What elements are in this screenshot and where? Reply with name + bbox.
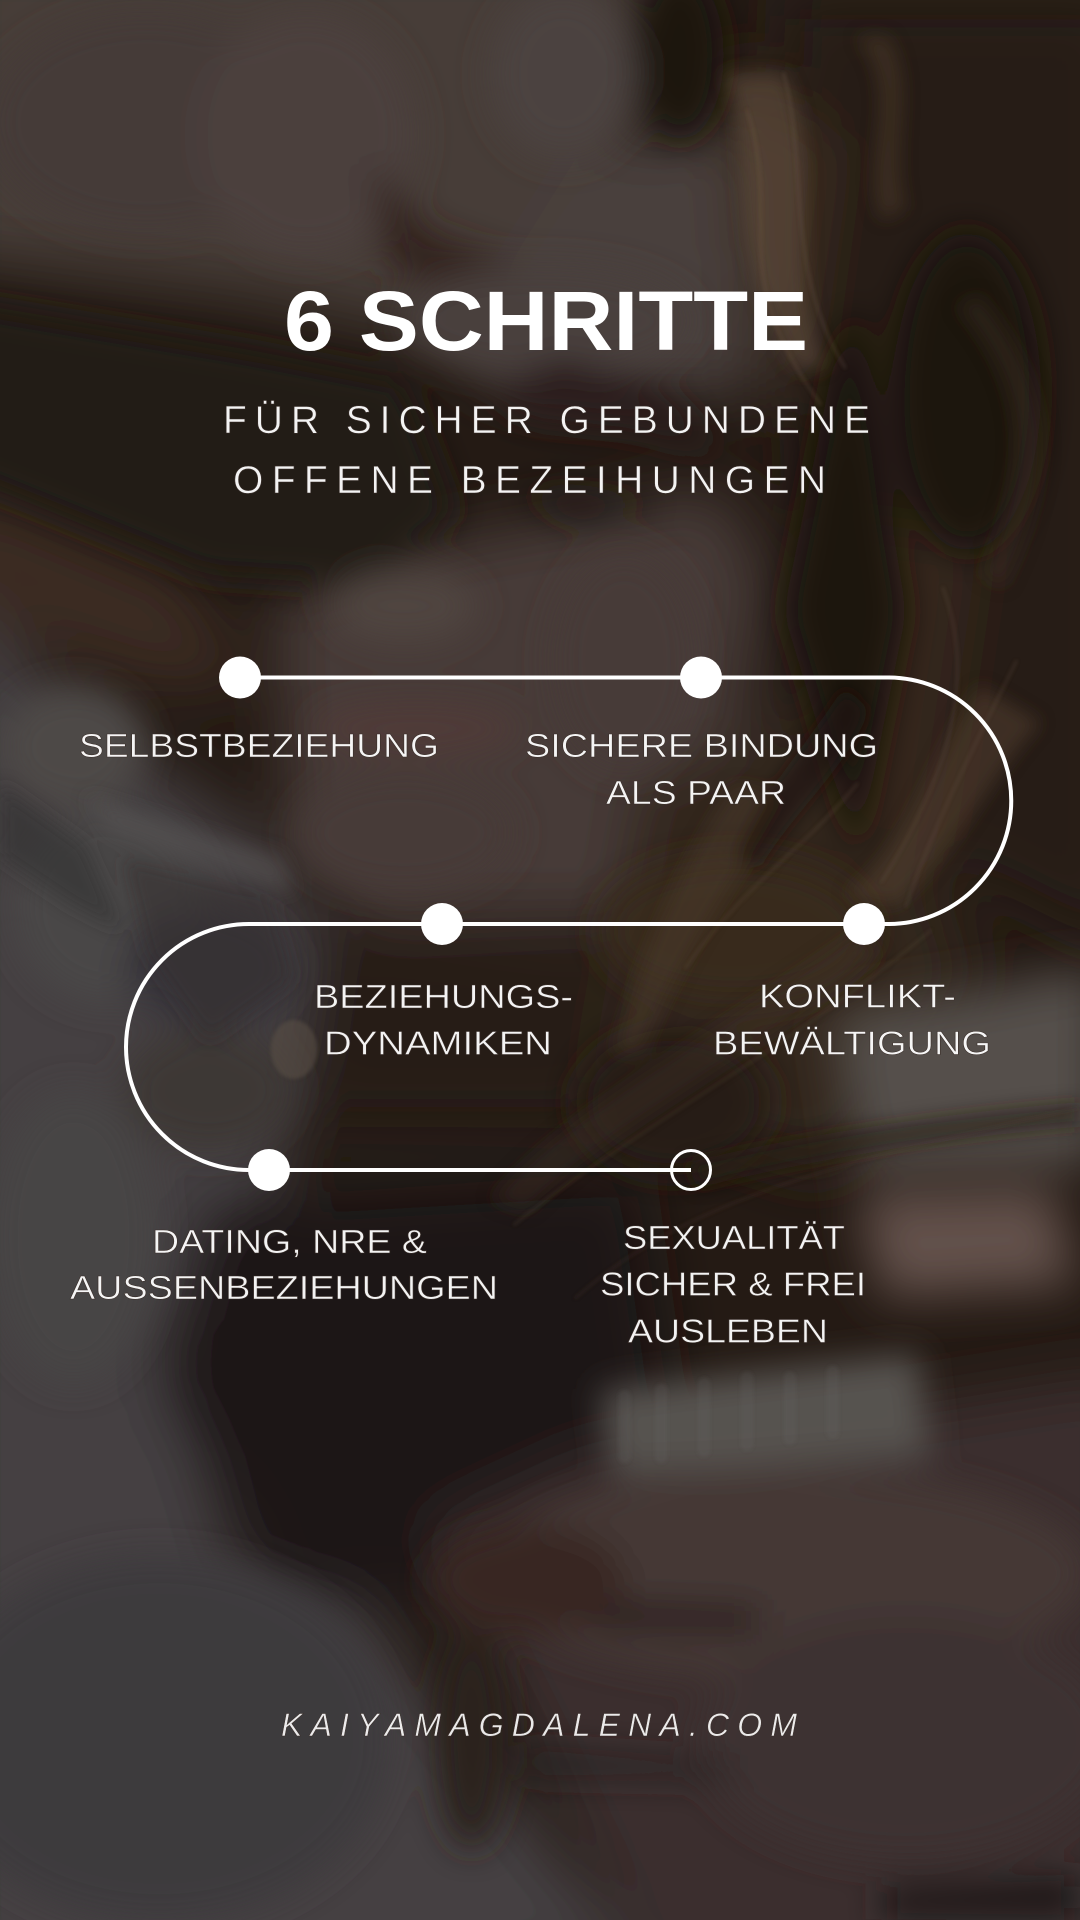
label: Sichere Bindung als Paar: ALS PAAR (606, 774, 786, 811)
step marker 2 (680, 656, 722, 698)
shirt (0, 588, 649, 1920)
subtitle: FÜR SICHER GEBUNDENE (223, 399, 870, 442)
label: Sichere Bindung als Paar (525, 727, 878, 811)
forehead (453, 122, 759, 392)
label: Sichere Bindung als Paar: SICHERE BINDUNG (525, 727, 878, 764)
serpentine line (126, 678, 1011, 1170)
hair highlights (722, 73, 827, 367)
neck (0, 478, 257, 686)
step marker 3 (843, 903, 885, 945)
subtitle (223, 399, 870, 502)
label: Beziehungsdynamiken (314, 978, 573, 1062)
dark hair centre (159, 1176, 686, 1616)
step marker 4 (421, 903, 463, 945)
label: Konfliktbewältigung: KONFLIKT- (759, 978, 956, 1014)
label: Konfliktbewältigung (713, 978, 991, 1062)
label: Sexualität sicher & frei ausleben: AUSLEBEN (628, 1312, 828, 1350)
label: Dating, NRE & Aussenbeziehungen: AUSSENBEZIEHUNGEN (70, 1269, 498, 1306)
hair shadows and lights (784, 306, 906, 857)
timeline: serpentine path with six steps (126, 656, 1011, 1191)
beard (0, 300, 456, 585)
lower right hand (429, 1371, 1080, 1920)
label: Beziehungsdynamiken: BEZIEHUNGS- (314, 978, 573, 1015)
label: Sexualität sicher & frei ausleben: SICHER & FREI (600, 1266, 866, 1302)
title: 6 SCHRITTE (284, 274, 808, 368)
man face (0, 0, 649, 331)
step marker 6: open end (672, 1150, 710, 1190)
step marker 1 (219, 656, 261, 698)
label: Dating, NRE & Aussenbeziehungen: DATING, NRE & (152, 1223, 427, 1260)
collar edges (0, 784, 122, 931)
label: Beziehungsdynamiken: DYNAMIKEN (324, 1024, 552, 1062)
hair strands (747, 110, 820, 404)
woman face (276, 490, 765, 918)
label: Sexualität sicher & frei ausleben: SEXUALITÄT (623, 1219, 845, 1256)
right hair (784, 0, 1080, 955)
label: Sexualität sicher & frei ausleben (600, 1219, 866, 1350)
label: Dating, NRE & Aussenbeziehungen (70, 1223, 498, 1306)
shirt tones (12, 808, 208, 1004)
subtitle: OFFENE BEZEIHUNGEN (233, 459, 826, 502)
step marker 5 (248, 1149, 290, 1191)
right lower (600, 1353, 931, 1476)
label: Konfliktbewältigung: BEWÄLTIGUNG (713, 1024, 991, 1062)
dark under chin (294, 918, 637, 1127)
label: Selbstbeziehung: SELBSTBEZIEHUNG (79, 727, 439, 764)
footer website: KAIYAMAGDALENA.COM (281, 1707, 797, 1743)
